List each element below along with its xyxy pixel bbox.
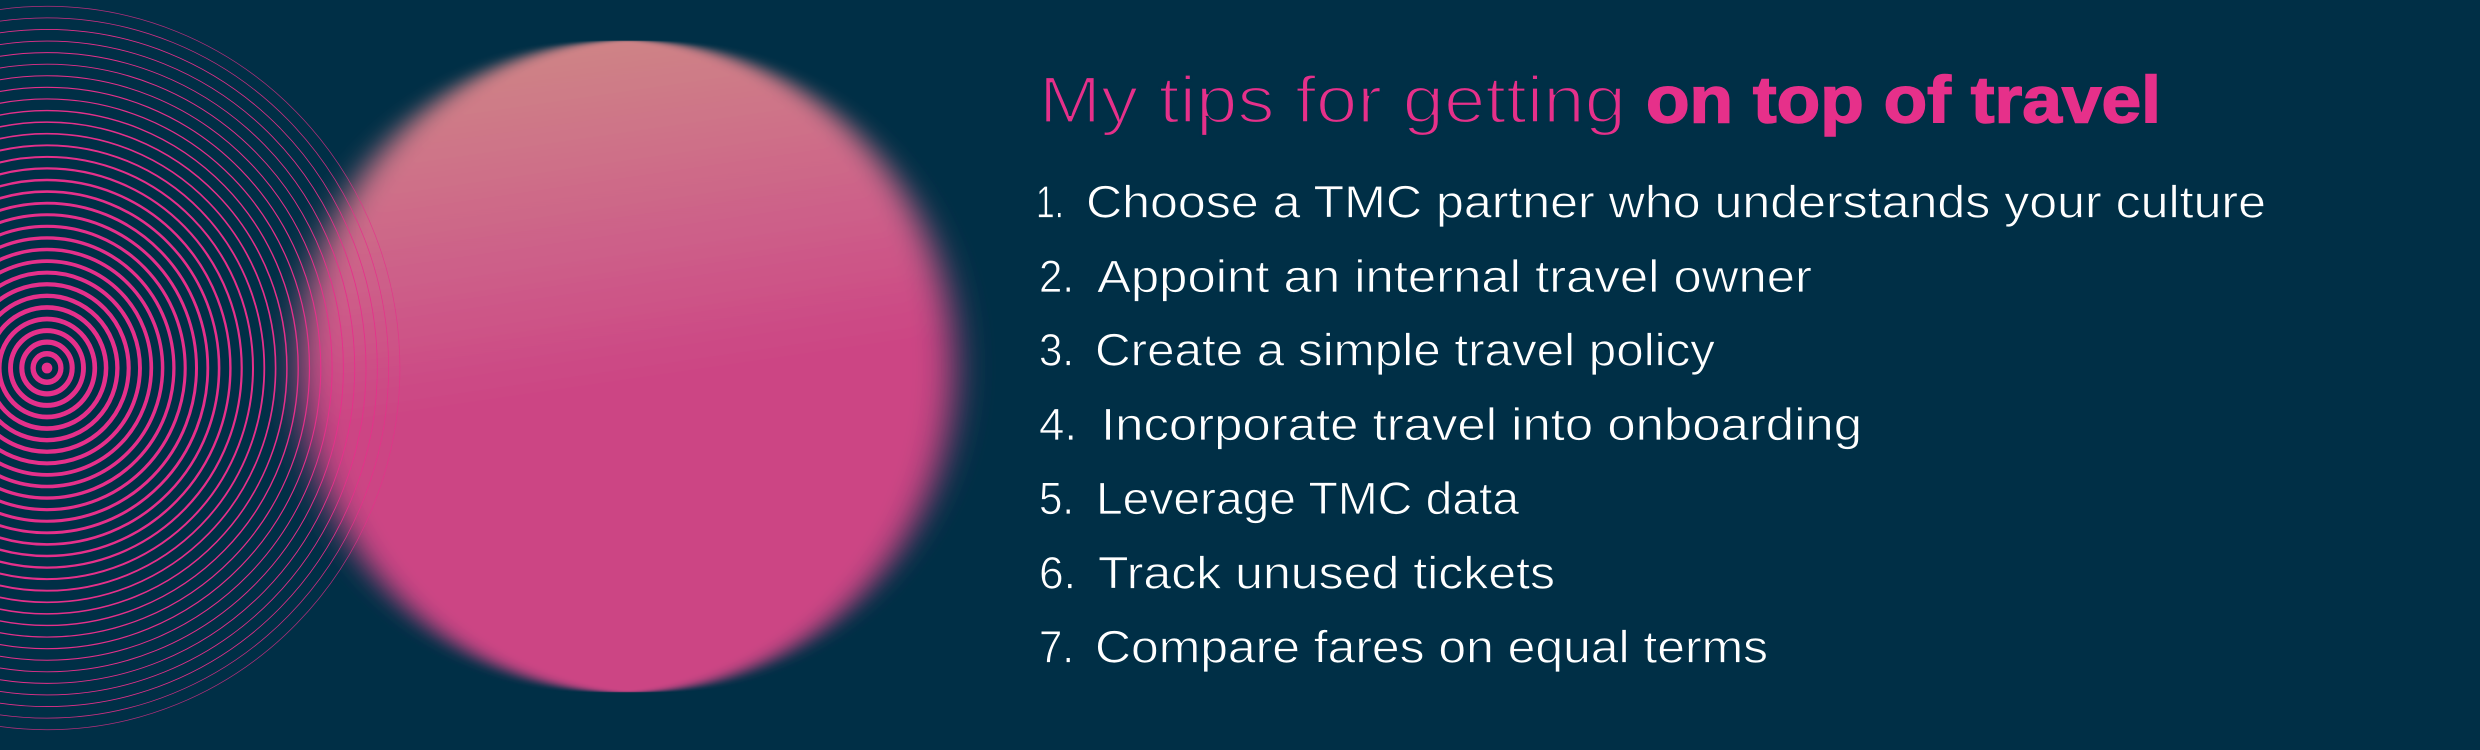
tip 6: Track unused tickets — [1098, 547, 1555, 598]
title: on top of travel — [1646, 63, 2161, 137]
tip 7: Compare fares on equal terms — [1095, 621, 1768, 672]
tip 6: 6. — [1039, 547, 1076, 598]
tip 5: 5. — [1039, 473, 1074, 524]
concentric pink rings — [0, 6, 400, 730]
title — [1039, 63, 2161, 137]
tip 1: 1. — [1036, 177, 1064, 228]
tip 2: 2. — [1039, 251, 1074, 302]
blurred pink gradient circle — [300, 40, 954, 692]
numbered list of tips — [1036, 177, 2266, 672]
tip 4: 4. — [1039, 399, 1077, 450]
tip 2: Appoint an internal travel owner — [1097, 251, 1812, 302]
tip 5: Leverage TMC data — [1096, 473, 1520, 524]
tip 3: Create a simple travel policy — [1095, 325, 1716, 376]
tip 1: Choose a TMC partner who understands your culture — [1086, 177, 2266, 228]
title: My tips for getting — [1039, 63, 1626, 137]
tip 7: 7. — [1039, 621, 1074, 672]
tip 3: 3. — [1039, 325, 1074, 376]
tip 4: Incorporate travel into onboarding — [1101, 399, 1862, 450]
